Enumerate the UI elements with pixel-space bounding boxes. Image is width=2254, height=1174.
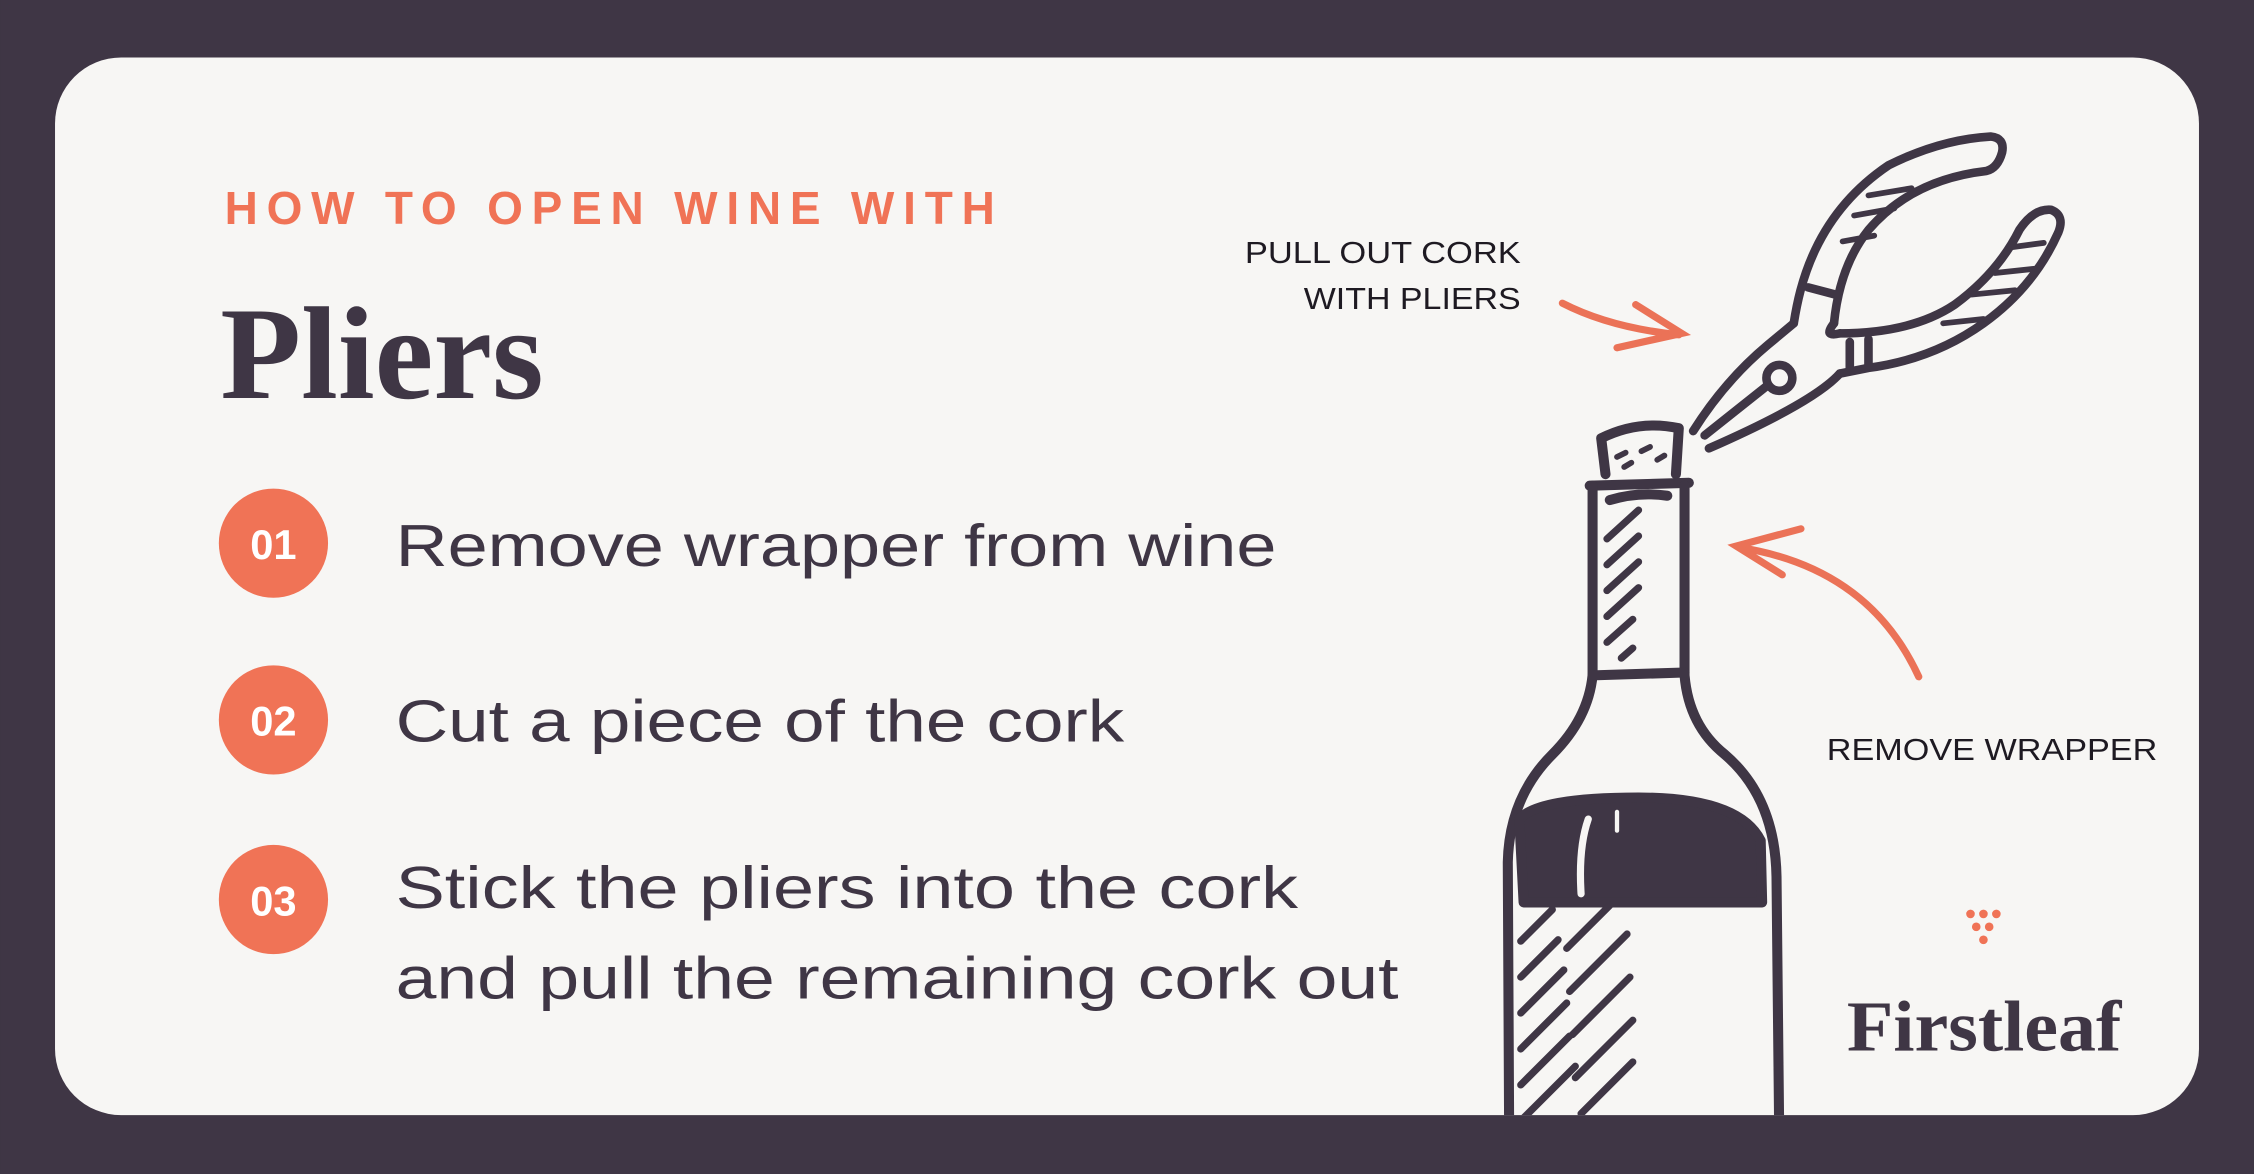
step 02: 02 [250, 698, 297, 745]
title: Pliers [220, 280, 544, 427]
illustration: pliers [1693, 137, 2061, 448]
step 03: Stick the pliers into the cork [396, 856, 1299, 921]
subtitle: HOW TO OPEN WINE WITH [225, 182, 995, 234]
step 02: Cut a piece of the cork [396, 689, 1125, 754]
step 01: 01 [250, 521, 297, 568]
arrow: to pliers [1562, 303, 1682, 348]
callout: remove wrapper: REMOVE WRAPPER [1827, 734, 2157, 767]
logo: grape icon [1966, 910, 2001, 944]
callout: pull out cork: PULL OUT CORK [1245, 237, 1521, 270]
arrow: to wrapper [1736, 529, 1919, 677]
illustration: bottle [1508, 425, 1779, 1150]
step 03: and pull the remaining cork out [396, 947, 1399, 1012]
callout: pull out cork: WITH PLIERS [1304, 283, 1521, 316]
logo: Firstleaf: Firstleaf [1847, 986, 2123, 1066]
callout: pull out cork [1245, 237, 1521, 316]
step 01 [219, 489, 1276, 598]
step 02 [219, 665, 1125, 775]
step 03: 03 [250, 877, 297, 924]
step 03 [219, 845, 1399, 1012]
step 01: Remove wrapper from wine [396, 514, 1276, 579]
